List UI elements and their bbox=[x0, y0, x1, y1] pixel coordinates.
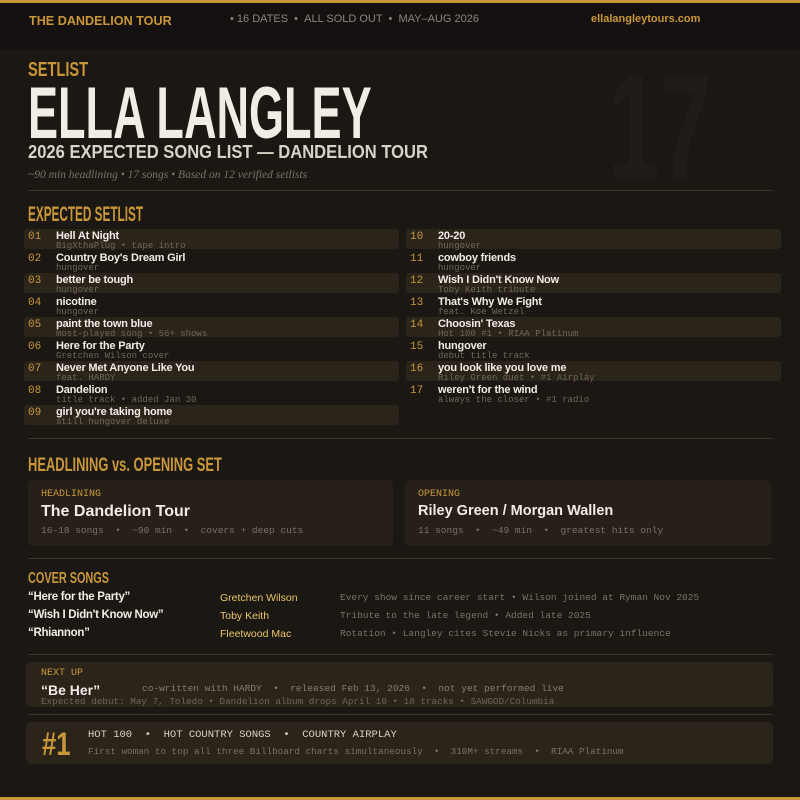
setlist left column: most-played song • 56+ shows bbox=[56, 329, 207, 339]
setlist left column: 07 bbox=[28, 363, 41, 375]
setlist left column: paint the town blue bbox=[56, 318, 152, 330]
setlist right column: hungover bbox=[438, 241, 481, 251]
heading: expected setlist: EXPECTED SETLIST bbox=[28, 203, 143, 226]
cover songs table: “Wish I Didn't Know Now” bbox=[28, 609, 163, 621]
setlist right column: 16 bbox=[410, 363, 423, 375]
setlist right column: Toby Keith tribute bbox=[438, 285, 535, 295]
subtitle: 2026 EXPECTED SONG LIST — DANDELION TOUR bbox=[28, 142, 428, 162]
card: headlining: The Dandelion Tour bbox=[41, 503, 190, 520]
setlist right column: weren't for the wind bbox=[438, 384, 537, 396]
setlist label: SETLIST bbox=[28, 59, 88, 81]
heading: headlining vs opening: HEADLINING vs. OPENING SET bbox=[28, 455, 222, 476]
top gold bar bbox=[0, 0, 800, 3]
cover songs table bbox=[28, 591, 699, 640]
setlist left column: hungover bbox=[56, 285, 99, 295]
setlist right column: 10 bbox=[410, 231, 423, 243]
next up box: Expected debut: May 7, Toledo • Dandelion album drops April 10 • 18 tracks • SAWGOD/Columbia bbox=[41, 696, 554, 707]
setlist left column: nicotine bbox=[56, 296, 97, 308]
setlist right column: Hot 100 #1 • RIAA Platinum bbox=[438, 329, 578, 339]
cover songs table: “Rhiannon” bbox=[28, 627, 90, 639]
setlist left column: 03 bbox=[28, 275, 41, 287]
setlist left column: 04 bbox=[28, 297, 41, 309]
cover songs table: Rotation • Langley cites Stevie Nicks as primary influence bbox=[340, 628, 671, 639]
setlist right column: That's Why We Fight bbox=[438, 296, 542, 308]
setlist left column: Never Met Anyone Like You bbox=[56, 362, 194, 374]
header: tour name: THE DANDELION TOUR bbox=[29, 13, 172, 28]
setlist left column: 06 bbox=[28, 341, 41, 353]
setlist left column: girl you're taking home bbox=[56, 406, 172, 418]
setlist left column: Hell At Night bbox=[56, 230, 119, 242]
cover songs table: Toby Keith bbox=[220, 610, 269, 622]
setlist right column: hungover bbox=[438, 340, 487, 352]
setlist left column: 09 bbox=[28, 407, 41, 419]
setlist left column: better be tough bbox=[56, 274, 133, 286]
setlist left column: hungover bbox=[56, 307, 99, 317]
header band bbox=[0, 3, 800, 49]
setlist right column: you look like you love me bbox=[438, 362, 566, 374]
setlist right column: Riley Green duet • #1 Airplay bbox=[438, 373, 595, 383]
cover songs table: “Here for the Party” bbox=[28, 591, 130, 603]
setlist left column: Country Boy's Dream Girl bbox=[56, 252, 185, 264]
setlist left column: still hungover deluxe bbox=[56, 417, 169, 427]
setlist left column: 08 bbox=[28, 385, 41, 397]
next up box bbox=[26, 662, 773, 707]
setlist right column: 12 bbox=[410, 275, 423, 287]
#1 achievement box: HOT 100 • HOT COUNTRY SONGS • COUNTRY AIRPLAY bbox=[88, 729, 397, 741]
setlist right column: feat. Koe Wetzel bbox=[438, 307, 524, 317]
header: tour facts: • 16 DATES • ALL SOLD OUT • MAY–AUG 2026 bbox=[230, 13, 479, 25]
next up box: NEXT UP bbox=[41, 668, 83, 679]
card: headlining bbox=[28, 480, 393, 546]
setlist left column: hungover bbox=[56, 263, 99, 273]
bottom gold bar bbox=[0, 797, 800, 800]
italic meta line: ~90 min headlining • 17 songs • Based on 12 verified setlists bbox=[28, 169, 307, 181]
card: headlining: HEADLINING bbox=[41, 489, 101, 500]
setlist left column: BigXthaPlug • tape intro bbox=[56, 241, 186, 251]
setlist right column: 11 bbox=[410, 253, 423, 265]
setlist right column: Choosin' Texas bbox=[438, 318, 515, 330]
#1 achievement box: #1 bbox=[42, 726, 70, 762]
setlist left column: 01 bbox=[28, 231, 41, 243]
next up box: “Be Her” bbox=[41, 682, 100, 698]
setlist right column: Wish I Didn't Know Now bbox=[438, 274, 559, 286]
setlist left column: 05 bbox=[28, 319, 41, 331]
setlist right column: 20-20 bbox=[438, 230, 465, 242]
setlist right column: cowboy friends bbox=[438, 252, 516, 264]
setlist right column bbox=[406, 229, 781, 405]
cover songs table: Every show since career start • Wilson joined at Ryman Nov 2025 bbox=[340, 592, 699, 603]
card: headlining: 16–18 songs • ~90 min • covers + deep cuts bbox=[41, 525, 303, 536]
cover songs table: Fleetwood Mac bbox=[220, 628, 291, 640]
#1 achievement box: First woman to top all three Billboard charts simultaneously • 310M+ streams • RIAA Platinum bbox=[88, 746, 624, 757]
setlist right column: 15 bbox=[410, 341, 423, 353]
cover songs table: Tribute to the late legend • Added late 2025 bbox=[340, 610, 591, 621]
next up box: co-written with HARDY • released Feb 13, 2026 • not yet performed live bbox=[142, 683, 564, 694]
card: opening: Riley Green / Morgan Wallen bbox=[418, 503, 613, 519]
card: opening bbox=[405, 480, 771, 546]
heading: cover songs: COVER SONGS bbox=[28, 570, 109, 587]
header: website: ellalangleytours.com bbox=[591, 13, 700, 25]
setlist left column: Here for the Party bbox=[56, 340, 145, 352]
setlist left column: Gretchen Wilson cover bbox=[56, 351, 169, 361]
setlist right column: 17 bbox=[410, 385, 423, 397]
big watermark number: 17 bbox=[608, 43, 711, 211]
#1 achievement box bbox=[26, 722, 773, 764]
setlist right column: always the closer • #1 radio bbox=[438, 395, 589, 405]
setlist right column: 14 bbox=[410, 319, 423, 331]
card: opening: 11 songs • ~49 min • greatest hits only bbox=[418, 525, 663, 536]
setlist right column: hungover bbox=[438, 263, 481, 273]
title: ELLA LANGLEY bbox=[28, 73, 372, 154]
setlist right column: debut title track bbox=[438, 351, 530, 361]
setlist left column: feat. HARDY bbox=[56, 373, 115, 383]
setlist left column: 02 bbox=[28, 253, 41, 265]
setlist left column: title track • added Jan 30 bbox=[56, 395, 196, 405]
card: opening: OPENING bbox=[418, 489, 460, 500]
cover songs table: Gretchen Wilson bbox=[220, 592, 298, 604]
setlist left column: Dandelion bbox=[56, 384, 107, 396]
setlist right column: 13 bbox=[410, 297, 423, 309]
setlist left column bbox=[24, 229, 399, 427]
